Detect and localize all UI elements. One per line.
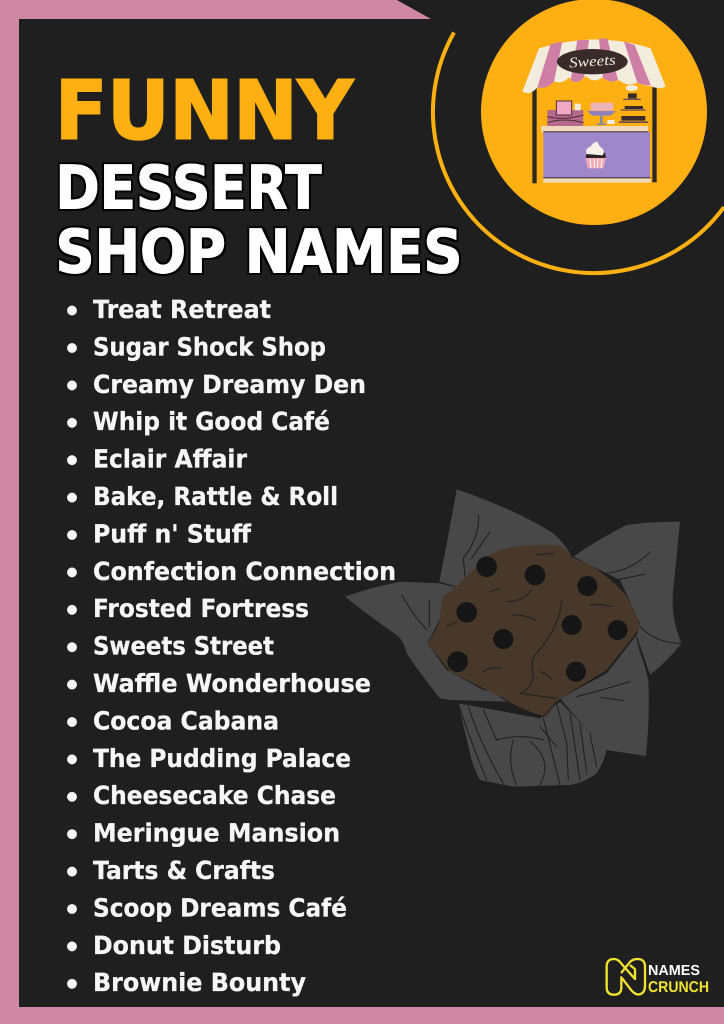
cash register bbox=[547, 101, 583, 127]
bullets bbox=[67, 306, 77, 989]
title line: FUNNY: FUNNY bbox=[55, 64, 354, 158]
list items: Whip it Good Café bbox=[93, 407, 330, 436]
list items: Frosted Fortress bbox=[93, 594, 309, 623]
icon: sweets shop stall bbox=[522, 39, 666, 183]
stall posts bbox=[532, 87, 657, 183]
list items: The Pudding Palace bbox=[93, 744, 351, 773]
list items bbox=[93, 295, 396, 997]
list items: Tarts & Crafts bbox=[93, 856, 275, 885]
muffin wrapper bbox=[345, 489, 682, 787]
list items: Puff n' Stuff bbox=[93, 519, 252, 548]
list items: Creamy Dreamy Den bbox=[93, 370, 366, 399]
logo wordmark: NAMES: NAMES bbox=[648, 963, 700, 979]
list items: Confection Connection bbox=[93, 557, 396, 586]
cake stand bbox=[587, 103, 616, 125]
muffin crease lines bbox=[402, 515, 682, 785]
chocolate chips bbox=[447, 556, 628, 682]
list items: Eclair Affair bbox=[93, 445, 248, 474]
sign bbox=[557, 49, 628, 74]
muffin top bbox=[427, 545, 640, 717]
list items: Donut Disturb bbox=[93, 931, 281, 960]
list items: Treat Retreat bbox=[93, 295, 271, 324]
list items: Cocoa Cabana bbox=[93, 706, 279, 735]
list items: Sugar Shock Shop bbox=[93, 332, 326, 361]
icon: faded muffin bbox=[345, 489, 682, 787]
title line: SHOP NAMES: SHOP NAMES bbox=[56, 218, 462, 288]
list items: Scoop Dreams Café bbox=[93, 893, 347, 922]
yellow ring arc bbox=[433, 32, 724, 273]
list items: Meringue Mansion bbox=[93, 819, 340, 848]
cupcake tiers bbox=[619, 85, 648, 123]
list items: Waffle Wonderhouse bbox=[93, 669, 371, 698]
list of shop names bbox=[67, 295, 396, 997]
list items: Cheesecake Chase bbox=[93, 781, 336, 810]
logo mark bbox=[607, 959, 645, 995]
counter bbox=[541, 126, 651, 183]
list items: Bake, Rattle & Roll bbox=[93, 482, 338, 511]
sign: Sweets bbox=[568, 51, 616, 71]
awning bbox=[522, 39, 666, 93]
title line: DESSERT: DESSERT bbox=[56, 154, 322, 224]
yellow circle bbox=[481, 0, 707, 225]
list items: Sweets Street bbox=[93, 632, 274, 661]
cupcake on counter bbox=[585, 141, 606, 168]
list items: Brownie Bounty bbox=[93, 968, 306, 997]
logo: Names Crunch bbox=[607, 959, 709, 996]
logo wordmark: CRUNCH: CRUNCH bbox=[648, 979, 709, 996]
title bbox=[55, 64, 462, 288]
